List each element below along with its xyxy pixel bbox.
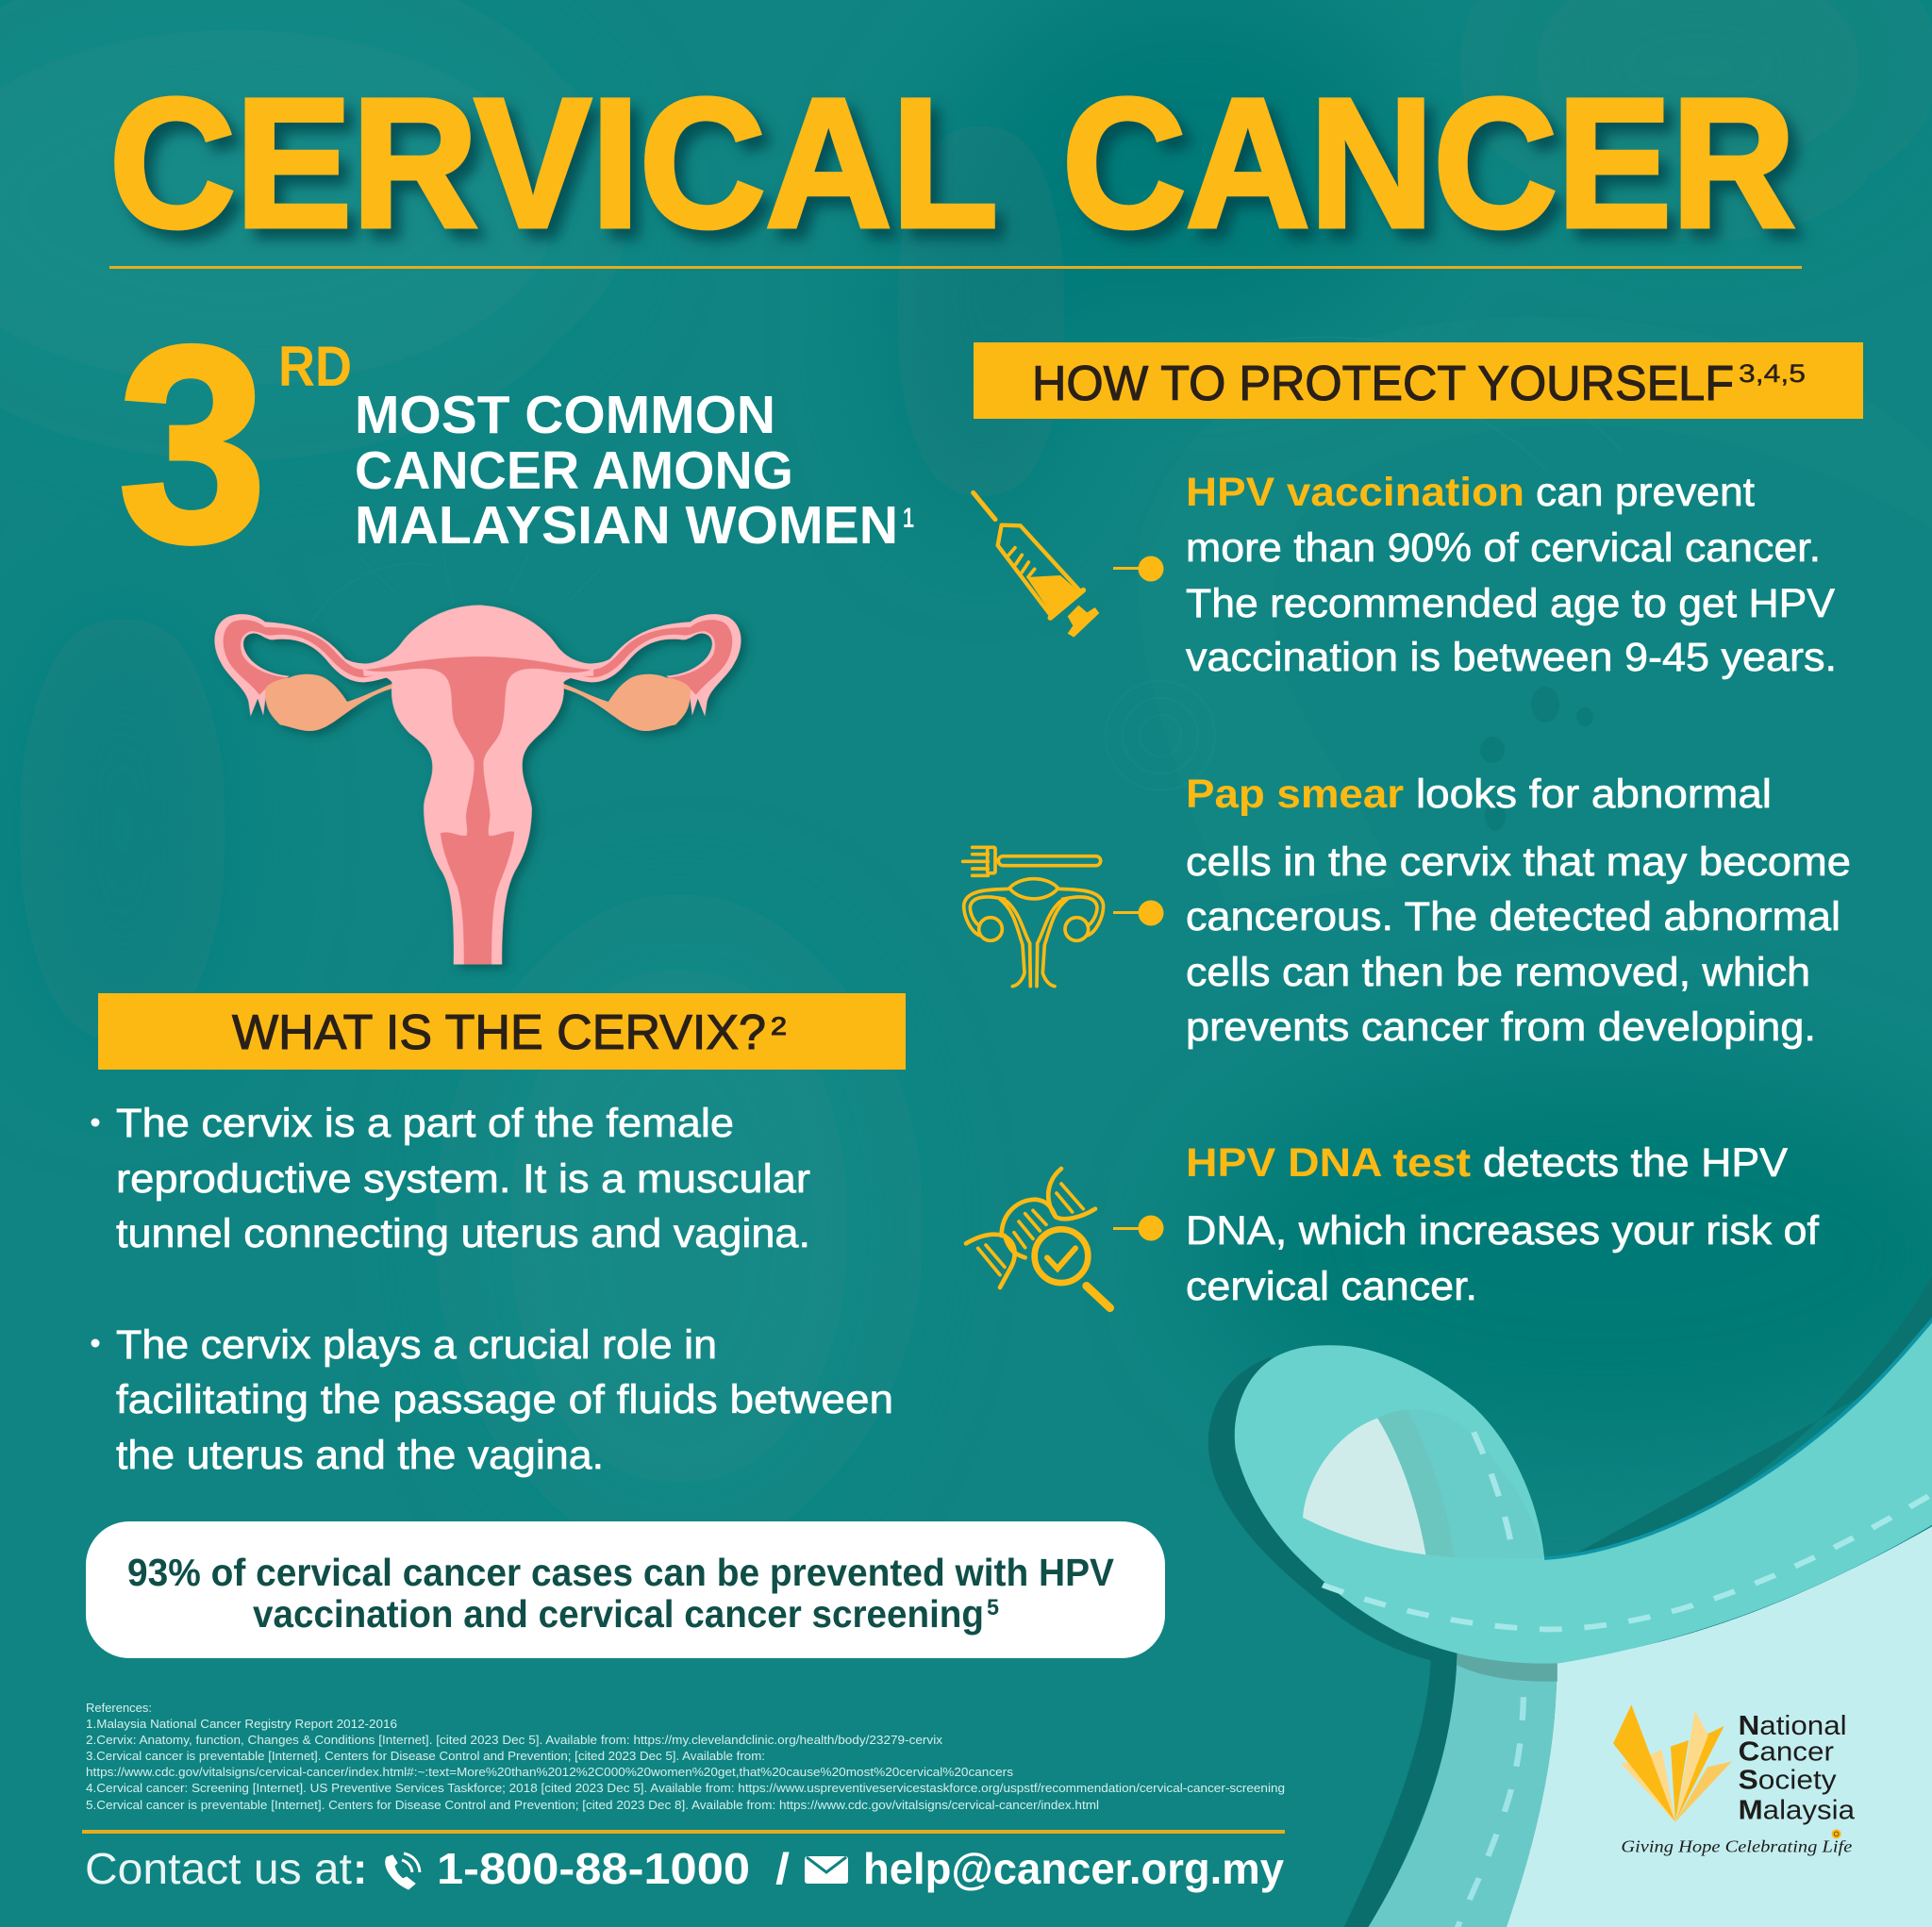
bullet one: reproductive system. It is a muscular — [116, 1156, 810, 1202]
dark outer ribbon edge — [1544, 1247, 1932, 1569]
icon: envelope — [805, 1856, 848, 1884]
statistic text: CANCER AMONG — [355, 440, 793, 501]
references: References: — [86, 1701, 152, 1715]
statistic text: MOST COMMON — [355, 385, 775, 445]
icon: phone — [386, 1853, 420, 1889]
callout: 93 percent preventable: vaccination and cervical cancer screening — [253, 1592, 984, 1636]
references: https://www.cdc.gov/vitalsigns/cervical-cancer/index.html#:~:text=More%20than%2012%2C000%20women%20get,that%20cause%20most%20cervical%20cancers — [86, 1765, 1014, 1779]
text: Pap smear: cells can then be removed, which — [1186, 950, 1810, 995]
ribbon tail — [1360, 1651, 1557, 1927]
left fallopian tube and ovary — [214, 614, 420, 731]
text: HPV vaccination: vaccination is between 9-45 years. — [1186, 635, 1837, 680]
statistic: third most common — [118, 288, 914, 600]
logo mark — [1613, 1704, 1732, 1822]
contact bar — [85, 1844, 1284, 1893]
title — [109, 60, 1795, 266]
back strand fill — [1407, 1409, 1544, 1558]
text: HPV DNA test: DNA, which increases your risk of — [1186, 1208, 1820, 1254]
references: 5.Cervical cancer is preventable [Internet]. Centers for Disease Control and Prevention; [cited 2023 Dec 8]. Available from: https://www.cdc.gov/vitalsigns/cervical-cancer/index.html — [86, 1798, 1099, 1812]
text: HPV vaccination — [1186, 470, 1837, 680]
uterus illustration — [214, 606, 741, 965]
loop hole — [1303, 1419, 1425, 1554]
uterus icon right half — [1037, 889, 1104, 987]
heading banner — [98, 993, 906, 1070]
logo spiral — [1832, 1829, 1841, 1838]
pale corner area — [1500, 1518, 1932, 1927]
references: 4.Cervical cancer: Screening [Internet]. US Preventive Services Taskforce; 2018 [cited 2023 Dec 5]. Available from: https://www.uspreventiveservicestaskforce.org/uspstf/recommendation/cervical-cancer-screening — [86, 1781, 1285, 1795]
text: HPV vaccination: more than 90% of cervical cancer. — [1186, 525, 1821, 571]
connector: vaccination — [1113, 557, 1164, 581]
references — [86, 1701, 1285, 1812]
logo: National Cancer Society Malaysia — [1613, 1704, 1855, 1855]
callout: 93 percent preventable — [86, 1521, 1165, 1658]
tail shadow under band — [1457, 1653, 1557, 1682]
text: HPV vaccination: can prevent — [1536, 470, 1755, 515]
heading banner: WHAT IS THE CERVIX? — [232, 1005, 766, 1060]
text: Pap smear: cells in the cervix that may become — [1186, 839, 1851, 885]
heading banner: 2 — [771, 1012, 787, 1040]
callout: 93 percent preventable: 5 — [987, 1595, 999, 1620]
uterus icon left half — [964, 889, 1030, 987]
ribbon graphic — [1208, 1247, 1932, 1927]
logo tagline: Giving Hope Celebrating Life — [1621, 1836, 1852, 1855]
contact bar: : — [353, 1844, 367, 1893]
uterine cavity and vagina — [364, 656, 591, 965]
loop shadow — [1208, 1357, 1459, 1927]
RD suffix: RD — [278, 335, 352, 398]
references: 1.Malaysia National Cancer Registry Report 2012-2016 — [86, 1717, 397, 1731]
uterus body — [362, 606, 593, 965]
logo wordmark: National — [1739, 1711, 1847, 1741]
icon: syringe — [974, 492, 1099, 638]
big number 3: 3 — [118, 288, 267, 600]
text: Pap smear: Pap smear — [1186, 772, 1404, 817]
bullet two: The cervix plays a crucial role in — [116, 1322, 717, 1368]
logo wordmark — [1739, 1711, 1855, 1825]
heading banner: HOW TO PROTECT YOURSELF — [1032, 357, 1734, 411]
references: 2.Cervix: Anatomy, function, Changes & Conditions [Internet]. [cited 2023 Dec 5]. Available from: https://my.clevelandclinic.org/health/body/23279-cervix — [86, 1733, 943, 1747]
logo wordmark: Society — [1739, 1766, 1837, 1796]
bullet two — [91, 1322, 893, 1478]
bullet one — [91, 1101, 810, 1256]
ribbon loop and band — [1235, 1302, 1932, 1664]
title: CANCER — [1062, 60, 1795, 266]
connector: DNA test — [1113, 1215, 1164, 1241]
icon: DNA and magnifier — [966, 1169, 1110, 1308]
text: HPV DNA test: HPV DNA test — [1186, 1140, 1471, 1186]
contact bar: help@cancer.org.my — [863, 1844, 1284, 1893]
title: CERVICAL — [109, 60, 998, 266]
bullet one: tunnel connecting uterus and vagina. — [116, 1211, 810, 1256]
statistic text: MALAYSIAN WOMEN — [355, 495, 898, 556]
contact bar: Contact us at — [85, 1844, 352, 1893]
statistic text — [355, 385, 914, 556]
text: Pap smear: looks for abnormal — [1416, 772, 1772, 817]
contact rule — [82, 1830, 1285, 1834]
text: HPV vaccination: HPV vaccination — [1186, 470, 1524, 515]
right fallopian tube and ovary — [536, 614, 741, 731]
text: HPV vaccination: The recommended age to get HPV — [1186, 581, 1835, 626]
heading banner: 3,4,5 — [1739, 359, 1806, 388]
ribbon blue edge — [1544, 1302, 1932, 1558]
loop dashes — [1474, 1432, 1510, 1540]
statistic text: 1 — [903, 503, 914, 534]
contact bar: / — [775, 1844, 790, 1893]
bullet two: facilitating the passage of fluids between — [116, 1377, 893, 1422]
back strand shading — [1377, 1410, 1455, 1557]
band dashes — [1323, 1494, 1932, 1630]
references: 3.Cervical cancer is preventable [Internet]. Centers for Disease Control and Prevention; [cited 2023 Dec 5]. Available from: — [86, 1749, 765, 1763]
logo wordmark: Cancer — [1739, 1737, 1834, 1768]
text: Pap smear — [1186, 772, 1851, 1050]
bullet two: the uterus and the vagina. — [116, 1433, 604, 1478]
text: Pap smear: cancerous. The detected abnormal — [1186, 894, 1840, 939]
icon: pap smear brush and uterus — [963, 847, 1104, 987]
text: HPV DNA test: cervical cancer. — [1186, 1264, 1477, 1309]
bullet one: The cervix is a part of the female — [116, 1101, 734, 1146]
contact bar: 1-800-88-1000 — [437, 1844, 750, 1893]
panel: what is the cervix — [91, 993, 906, 1478]
connector: pap smear — [1113, 900, 1164, 926]
callout: 93 percent preventable: 93% of cervical cancer cases can be prevented with HPV — [127, 1551, 1115, 1594]
logo wordmark: Malaysia — [1739, 1795, 1855, 1825]
tail dashes — [1452, 1697, 1524, 1927]
text: HPV DNA test: detects the HPV — [1483, 1140, 1788, 1186]
panel: how to protect yourself — [963, 342, 1863, 1309]
text: Pap smear: prevents cancer from developing. — [1186, 1005, 1816, 1050]
heading banner — [974, 342, 1863, 419]
text: HPV DNA test — [1186, 1140, 1820, 1309]
title rule — [109, 266, 1802, 269]
